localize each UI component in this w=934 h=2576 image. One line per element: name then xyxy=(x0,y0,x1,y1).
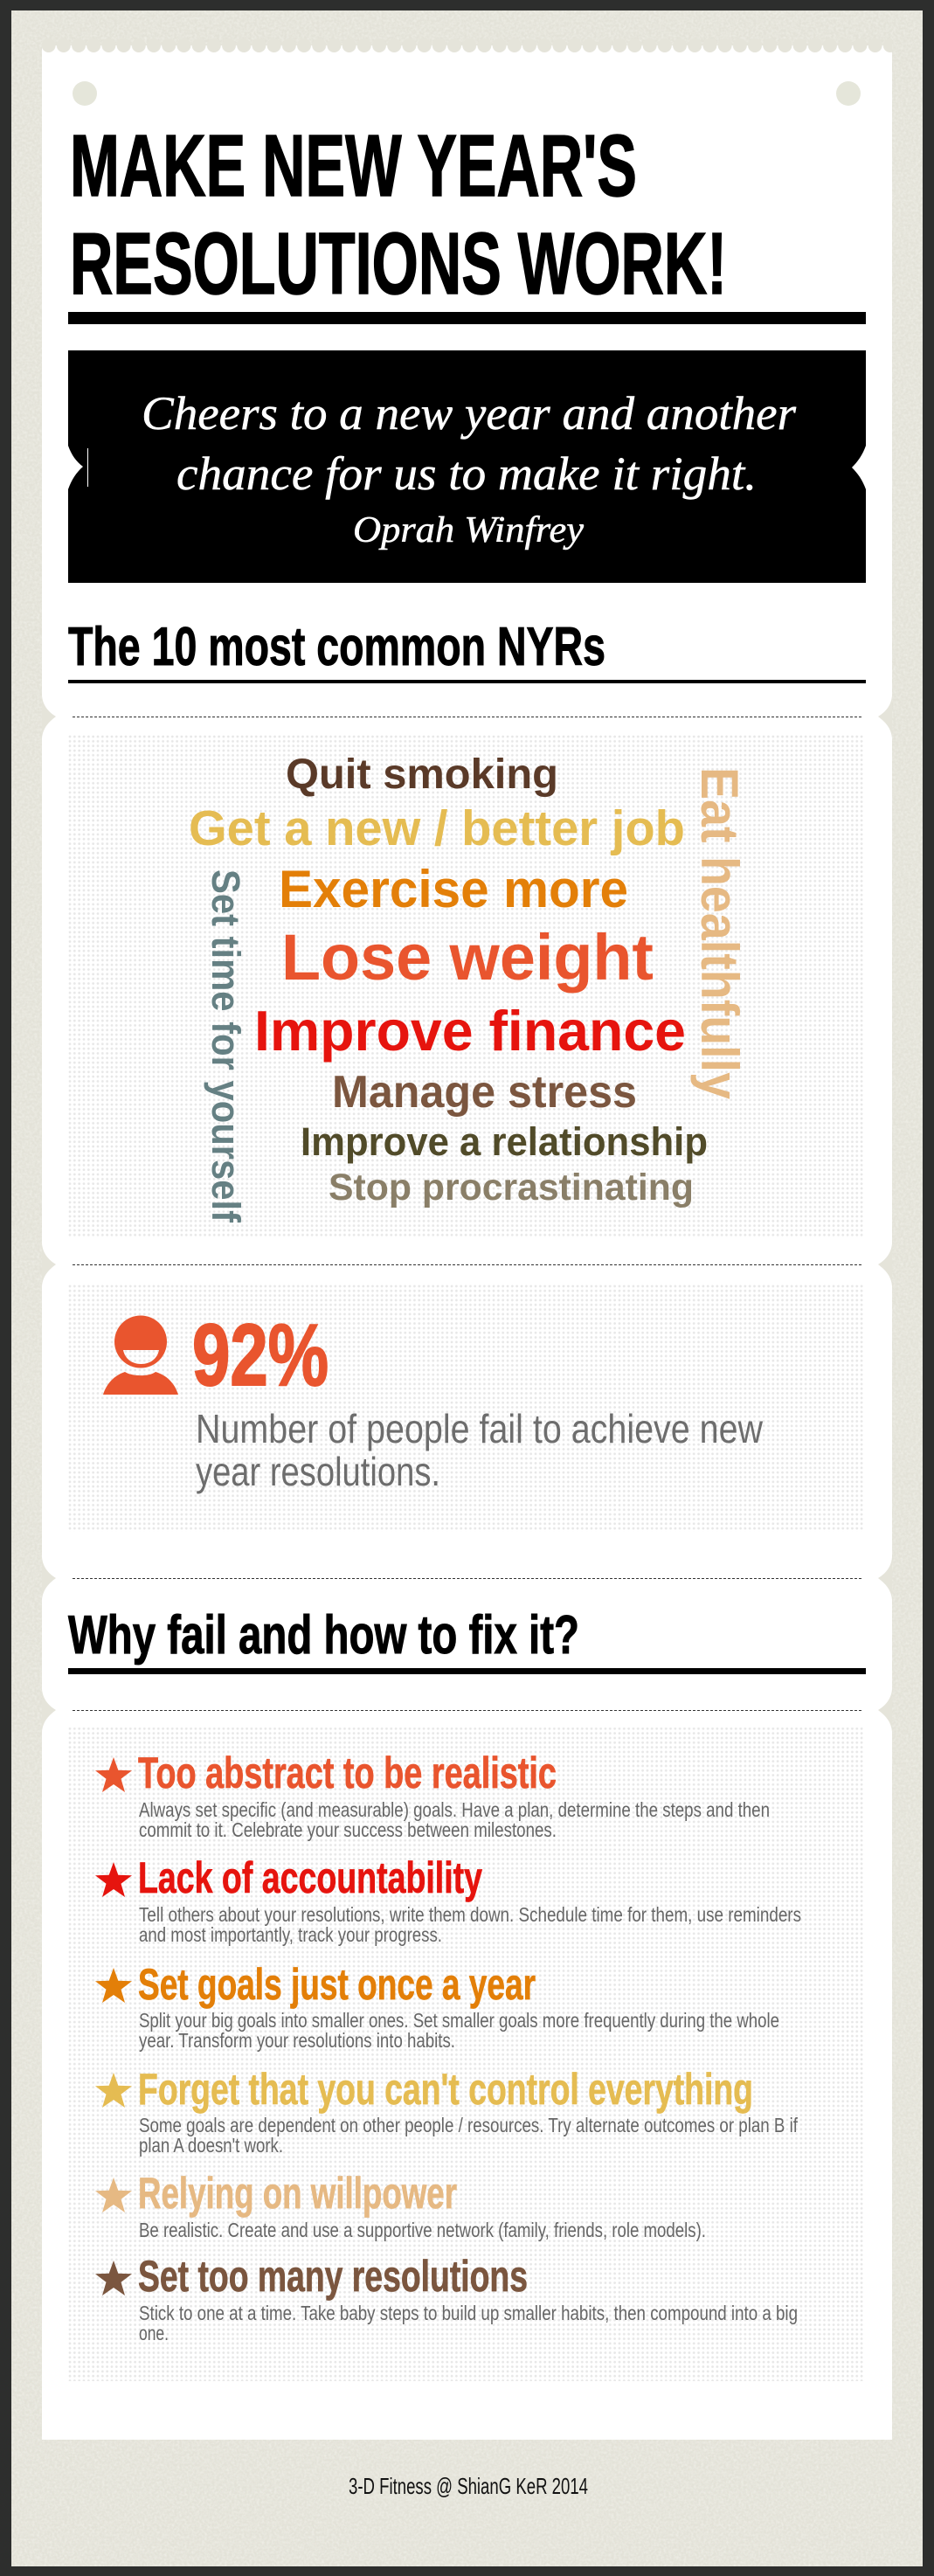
item heading: Lack of accountability xyxy=(138,1853,482,1902)
footer credit: 3-D Fitness @ ShianG KeR 2014 xyxy=(349,2473,588,2499)
heading: the 10 most common NYRs: The 10 most common NYRs xyxy=(68,617,605,677)
statistic: 92%: 92% xyxy=(192,1306,329,1404)
punch hole left xyxy=(73,81,97,106)
panel: word cloud xyxy=(68,735,863,1236)
item text: commit to it. Celebrate your success between milestones. xyxy=(139,1818,557,1841)
statistic description: year resolutions. xyxy=(196,1449,440,1494)
item heading: Set goals just once a year xyxy=(138,1960,536,2009)
statistic description: Number of people fail to achieve new xyxy=(196,1406,764,1451)
item text: plan A doesn't work. xyxy=(139,2134,283,2157)
panel: 92 percent statistic xyxy=(68,1283,863,1532)
word: eat healthfully: Eat healthfully xyxy=(690,767,749,1100)
word: improve finance: Improve finance xyxy=(254,999,686,1063)
item: relying on willpower xyxy=(95,2169,706,2241)
icon: smiling person xyxy=(103,1316,178,1395)
item text xyxy=(139,2009,779,2052)
item: set too many resolutions xyxy=(95,2252,798,2344)
item text: Always set specific (and measurable) goals. Have a plan, determine the steps and then xyxy=(139,1798,770,1821)
item: lack of accountability xyxy=(95,1853,801,1946)
icon: star xyxy=(95,2073,132,2108)
item text: one. xyxy=(139,2322,169,2344)
panel: reasons and fixes xyxy=(68,1728,863,2381)
item text xyxy=(139,2114,798,2157)
item: too abstract xyxy=(95,1748,770,1841)
quote banner xyxy=(68,350,866,583)
item text: and most importantly, track your progress. xyxy=(139,1923,442,1946)
item text xyxy=(139,1903,801,1946)
item heading: Set too many resolutions xyxy=(138,2252,528,2301)
item heading: Too abstract to be realistic xyxy=(138,1748,557,1797)
item: forget you can't control everything xyxy=(95,2065,798,2157)
title: MAKE NEW YEAR'S xyxy=(70,117,637,215)
item heading: Relying on willpower xyxy=(138,2169,457,2218)
item text: Split your big goals into smaller ones. Set smaller goals more frequently during the whole xyxy=(139,2009,779,2032)
icon: star xyxy=(95,2261,132,2296)
item text: Tell others about your resolutions, write them down. Schedule time for them, use reminders xyxy=(139,1903,801,1926)
item text xyxy=(139,1798,770,1841)
word: improve a relationship: Improve a relationship xyxy=(301,1119,708,1164)
icon: star xyxy=(95,1968,132,2003)
quote text: Cheers to a new year and another xyxy=(142,387,797,440)
word: lose weight: Lose weight xyxy=(281,921,654,994)
heading: why fail and how to fix it: Why fail and how to fix it? xyxy=(68,1605,579,1665)
item text xyxy=(139,2302,798,2344)
icon: star xyxy=(95,1862,132,1897)
item text: year. Transform your resolutions into habits. xyxy=(139,2029,455,2052)
icon: star xyxy=(95,2178,132,2212)
title xyxy=(70,117,727,313)
icon: star xyxy=(95,1757,132,1792)
word: manage stress: Manage stress xyxy=(332,1067,637,1118)
word: quit smoking: Quit smoking xyxy=(286,751,558,798)
word: get a new / better job: Get a new / better job xyxy=(189,800,685,856)
item: set goals once a year xyxy=(95,1960,779,2052)
item text: Stick to one at a time. Take baby steps to build up smaller habits, then compound into a big xyxy=(139,2302,798,2324)
item text: Be realistic. Create and use a supportive network (family, friends, role models). xyxy=(139,2219,706,2241)
word: stop procrastinating: Stop procrastinating xyxy=(329,1167,694,1208)
title rule xyxy=(68,312,866,324)
quote text xyxy=(142,387,797,500)
word: set time for yourself: Set time for yourself xyxy=(204,869,248,1223)
word: exercise more: Exercise more xyxy=(279,860,628,918)
item text: Some goals are dependent on other people / resources. Try alternate outcomes or plan B if xyxy=(139,2114,798,2136)
statistic description xyxy=(196,1406,764,1494)
quote attribution: Oprah Winfrey xyxy=(353,510,584,551)
punch hole right xyxy=(836,81,861,106)
quote text: chance for us to make it right. xyxy=(176,447,757,500)
